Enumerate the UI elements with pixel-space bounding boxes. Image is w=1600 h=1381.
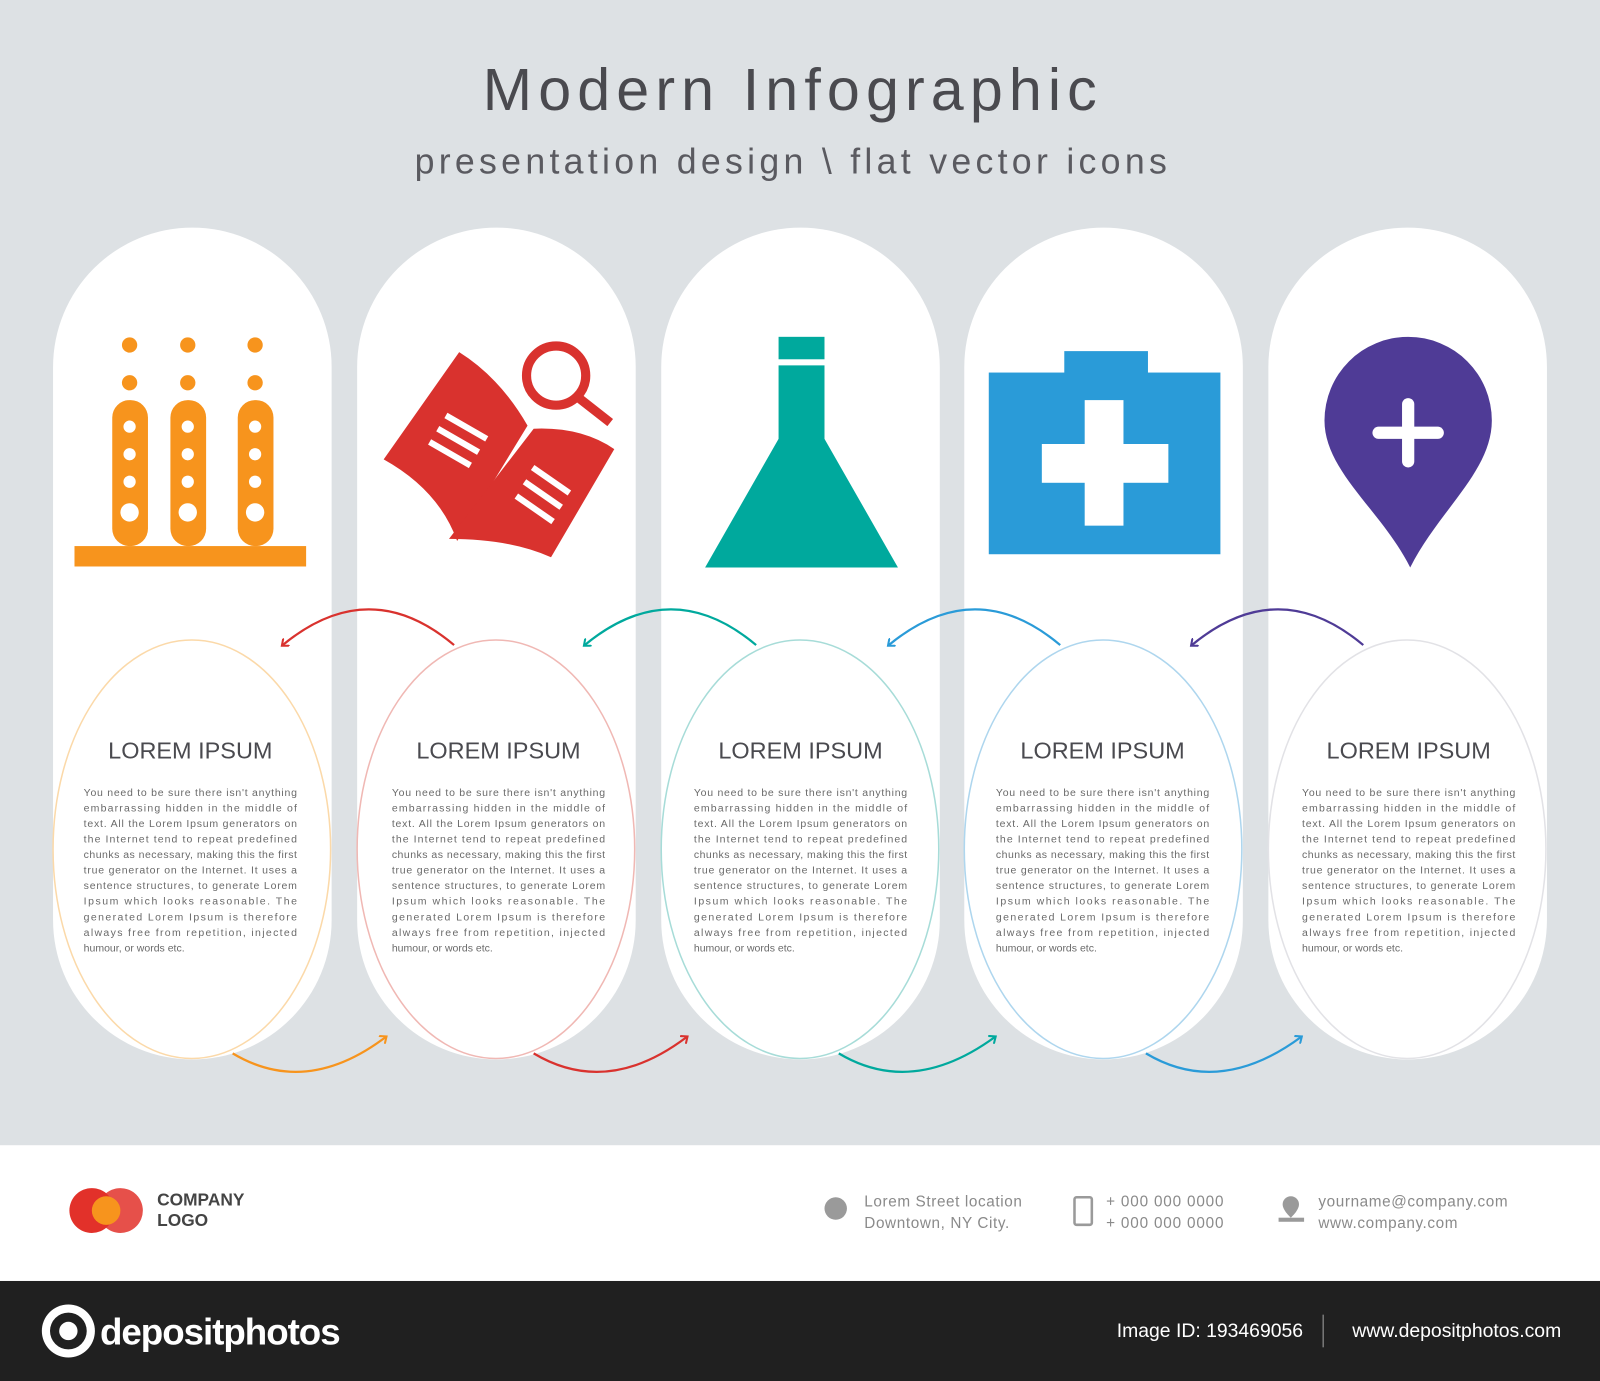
bottom bar: www.depositphotos.com [1351,1320,1561,1342]
contact: address: Lorem Street location [864,1193,1023,1210]
arrows: top connectors [283,609,1363,645]
icon: location pin plus [1324,337,1492,568]
panel: column 5 [1268,228,1547,1059]
bottom bar: Image ID: 193469056 [1117,1320,1303,1342]
text block: column 3 [694,737,907,954]
icon: medical case [989,351,1220,554]
contact: email [1279,1193,1508,1232]
text block: column 4 [996,737,1209,954]
text block: column 1 [84,737,297,954]
icon: flask [705,337,898,568]
panel: column 1 [53,228,332,1059]
panel: column 2 [357,228,636,1059]
contact: phone: + 000 000 0000 [1106,1193,1224,1210]
contact: email: yourname@company.com [1318,1193,1508,1210]
icon: book with magnifier [384,346,614,557]
subtitle: presentation design \ flat vector icons [415,142,1171,182]
icon: test tubes [74,337,306,566]
contact: phone [1074,1193,1224,1232]
panel: column 4 [964,228,1243,1059]
bottom bar: depositphotos [100,1311,340,1352]
text block: column 2 [392,737,605,954]
contact: email: www.company.com [1317,1215,1458,1232]
title: Modern Infographic [483,56,1103,123]
contact: address [824,1193,1023,1232]
logo: COMPANY [157,1189,245,1209]
panel: column 3 [661,228,940,1059]
logo [69,1188,245,1233]
contact: address: Downtown, NY City. [864,1215,1010,1232]
arrows: bottom connectors [233,1037,1301,1072]
logo: LOGO [157,1210,208,1230]
contact: phone: + 000 000 0000 [1106,1215,1224,1232]
text block: column 5 [1302,737,1516,954]
bottom bar [0,1281,1600,1381]
footer [0,1145,1600,1281]
